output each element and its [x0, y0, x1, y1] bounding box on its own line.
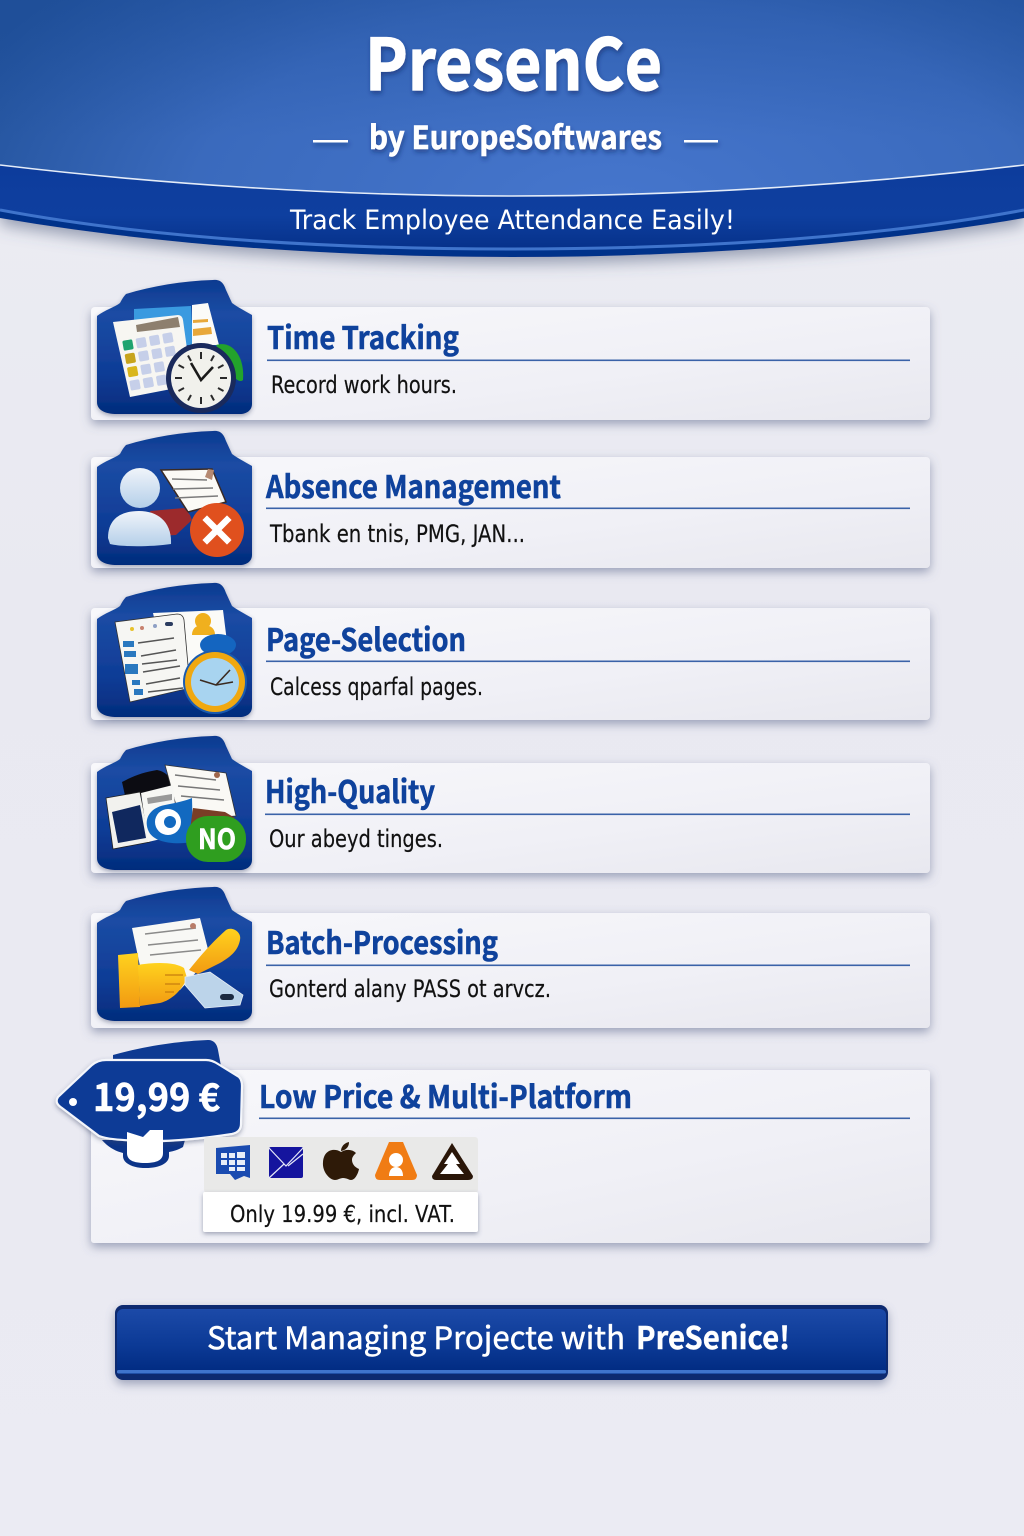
tagline: Track Employee Attendance Easily! — [289, 205, 735, 236]
panel: Page-Selection — [91, 583, 930, 720]
heading: High-Quality — [265, 767, 435, 812]
call-to-action button: PreSenice! — [636, 1313, 790, 1358]
call-to-action button — [115, 1305, 888, 1380]
price tag — [57, 1040, 242, 1168]
description: Gonterd alany PASS ot arvcz. — [269, 975, 551, 1003]
header banner — [0, 0, 1024, 257]
heading: Page-Selection — [266, 615, 466, 660]
icon: page and stopwatch — [97, 583, 252, 717]
icon: mail — [269, 1147, 303, 1178]
icon: person absent — [97, 431, 252, 565]
icon: apple — [323, 1142, 359, 1180]
price note: Only 19.99 €, incl. VAT. — [230, 1202, 455, 1228]
description: Record work hours. — [271, 371, 457, 399]
heading: Absence Management — [265, 462, 561, 507]
description: Our abeyd tinges. — [269, 825, 443, 853]
icon: windows — [216, 1145, 250, 1180]
panel: Batch-Processing — [91, 887, 930, 1028]
icon: documents with NO badge — [97, 736, 252, 870]
platform icons row — [204, 1137, 478, 1193]
panel: Absence Management — [91, 431, 930, 568]
description: Calcess qparfal pages. — [270, 673, 483, 701]
subtitle: by EuropeSoftwares — [369, 113, 662, 159]
title: PresenCe — [365, 9, 662, 111]
icon: calendar and clock — [97, 280, 252, 414]
panel: Time Tracking — [91, 280, 930, 420]
heading: Low Price & Multi-Platform — [259, 1072, 632, 1117]
call-to-action button: Start Managing Projecte with — [207, 1313, 625, 1358]
icon: hands and document — [97, 887, 252, 1021]
panel: High-Quality — [91, 736, 930, 873]
description: Tbank en tnis, PMG, JAN... — [269, 520, 525, 548]
panel: Low Price and Multi-Platform — [57, 1040, 930, 1243]
price tag: 19,99 € — [93, 1067, 221, 1122]
icon: dark triangle — [432, 1143, 473, 1180]
price note — [203, 1192, 478, 1232]
heading: Time Tracking — [267, 313, 459, 358]
icon: orange triangle — [375, 1142, 417, 1180]
icon: documents with NO badge: NO — [198, 818, 236, 858]
heading: Batch-Processing — [266, 918, 498, 963]
